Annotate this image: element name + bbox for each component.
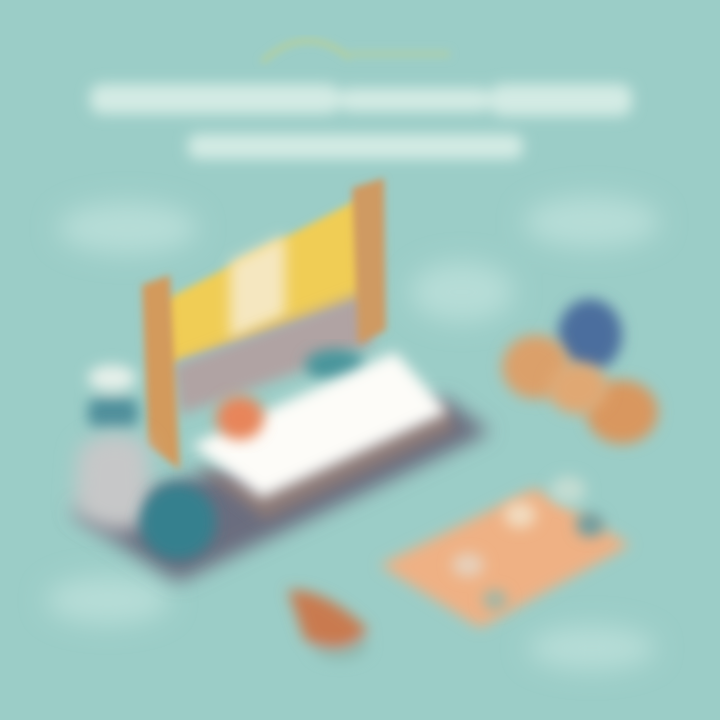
- middle basket: [548, 362, 608, 414]
- headboard yellow panel: [165, 192, 372, 365]
- clouds: [46, 196, 660, 670]
- basket group: [502, 299, 658, 444]
- bed illustration: [70, 178, 490, 582]
- mattress: [192, 352, 448, 498]
- mattress base: [195, 405, 455, 520]
- teal ball: [140, 484, 216, 560]
- peach mat: [380, 476, 630, 628]
- right basket: [586, 380, 658, 444]
- floor platform: [70, 398, 490, 582]
- headboard centre panel: [230, 235, 285, 340]
- white-teal jar: [88, 365, 138, 428]
- right post: [352, 178, 386, 345]
- title: blurred text lines: [90, 84, 632, 159]
- left basket: [502, 335, 570, 399]
- mat details: [452, 476, 604, 610]
- left post: [142, 275, 180, 470]
- heading: small yellow arc: [262, 41, 450, 62]
- slipper: [288, 590, 368, 661]
- orange pillow: [216, 396, 264, 440]
- grey vase: [74, 434, 152, 530]
- headboard lower grey band: [172, 292, 372, 415]
- blue item: [558, 299, 622, 371]
- teal pillow: [305, 349, 365, 381]
